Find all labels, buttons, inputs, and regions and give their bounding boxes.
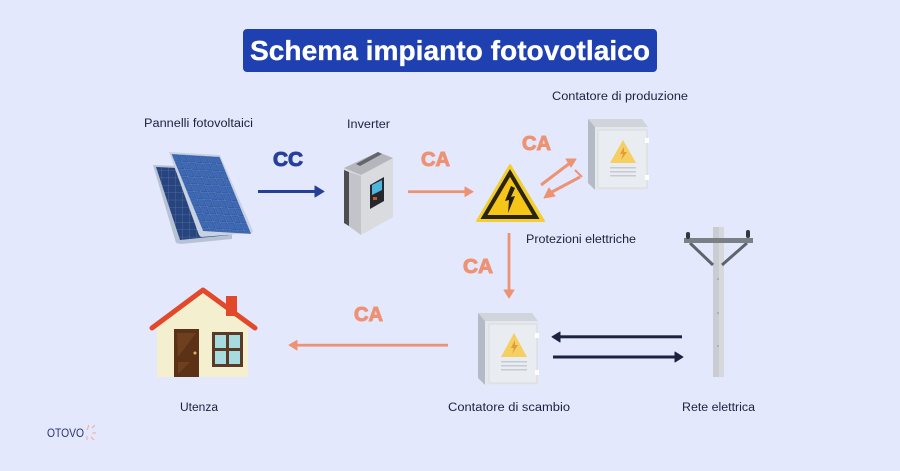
label: contatore di produzione: Contatore di produzione <box>552 91 688 103</box>
title: Schema impianto fotovotlaico <box>250 35 650 66</box>
icon: contatore di produzione <box>588 119 649 190</box>
logo: otovo: OTOVO <box>47 426 84 440</box>
icon: contatore di scambio <box>478 313 539 385</box>
label: CA protezioni: CA <box>463 256 493 278</box>
arrow: contatore di scambio to utenza <box>289 340 448 350</box>
arrow: inverter to protezioni <box>408 187 473 196</box>
icon: house <box>152 290 255 377</box>
icon: utility pole <box>684 227 753 377</box>
label: rete elettrica: Rete elettrica <box>682 402 756 414</box>
label: CC: CC <box>273 149 303 171</box>
label: inverter: Inverter <box>347 119 390 131</box>
arrow: rete to contatore di scambio <box>552 332 682 342</box>
label: pannelli fotovoltaici: Pannelli fotovoltaici <box>144 118 253 130</box>
label: CA contatore produzione: CA <box>522 133 551 155</box>
arrow: contatore di scambio to rete <box>553 352 683 362</box>
arrows: protezioni and contatore di produzione <box>541 159 582 198</box>
label: utenza: Utenza <box>180 402 219 414</box>
icon: solar panels <box>153 152 253 244</box>
icon: warning triangle <box>477 165 544 221</box>
title <box>243 29 657 72</box>
label: contatore di scambio: Contatore di scambio <box>448 402 570 414</box>
label: protezioni elettriche: Protezioni elettriche <box>526 234 636 246</box>
label: CA inverter: CA <box>421 149 450 171</box>
arrow: protezioni to contatore di scambio <box>504 233 514 298</box>
icon: inverter <box>344 152 393 235</box>
arrow: pannelli to inverter <box>258 186 324 197</box>
label: CA utenza: CA <box>354 304 383 326</box>
